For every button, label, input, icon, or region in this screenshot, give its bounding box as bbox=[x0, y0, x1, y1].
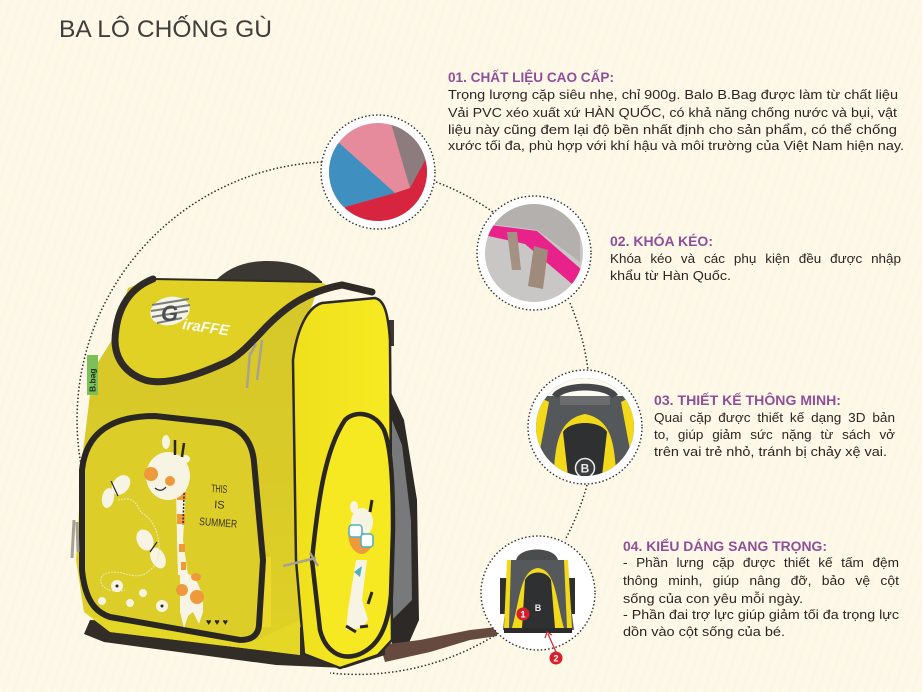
shoulder strap bbox=[388, 386, 419, 650]
flap top edge bbox=[153, 279, 322, 282]
text block 04: thông minh, giúp nâng đỡ, bảo vệ cột bbox=[623, 573, 899, 588]
circle 2: zipper bbox=[477, 196, 591, 310]
badge 1: 1 bbox=[520, 610, 526, 620]
text block 04: sống của con yêu mỗi ngày. bbox=[623, 591, 803, 606]
giraffe neck bbox=[176, 488, 188, 575]
text block 01: Vải PVC xéo xuất xứ HÀN QUỐC, có khả năng chống nước và bụi, vật bbox=[448, 105, 897, 120]
text block 04: 04. KIỂU DÁNG SANG TRỌNG: bbox=[623, 539, 827, 554]
front panel bbox=[76, 279, 320, 655]
butterflies bbox=[100, 471, 169, 591]
brand tag: B.bag bbox=[88, 368, 98, 392]
hearts: ♥♥♥ bbox=[206, 617, 228, 627]
side pocket bbox=[312, 414, 393, 657]
lower strap tail bbox=[380, 627, 497, 662]
back handle bbox=[214, 261, 322, 290]
flap logo: G bbox=[161, 301, 178, 326]
side giraffe bbox=[346, 500, 374, 632]
text block 03: trên vai trẻ nhỏ, tránh bị chảy xệ vai. bbox=[654, 444, 887, 459]
bag bottom bbox=[84, 620, 385, 668]
circle 3: handle detail bbox=[528, 370, 642, 484]
flowers bbox=[98, 580, 168, 612]
arrow to badge 2 bbox=[545, 632, 556, 652]
back mesh bbox=[392, 420, 412, 620]
this is summer lettering: SUMMER bbox=[199, 516, 238, 531]
pocket pull bbox=[72, 520, 78, 558]
text block 04: dồn vào cột sống của bé. bbox=[623, 624, 785, 639]
giraffe illustration bbox=[144, 435, 204, 628]
top flap bbox=[115, 279, 330, 382]
text block 01: Trọng lượng cặp siêu nhẹ, chỉ 900g. Balo B.Bag được làm từ chất liệu bbox=[448, 87, 898, 102]
text block 04: - Phần đai trợ lực giúp giảm tối đa trọng lực bbox=[623, 607, 900, 622]
top strap bump bbox=[389, 320, 394, 346]
text block 02 bbox=[610, 234, 901, 283]
text block 04: - Phần lưng cặp được thiết kế tấm đệm bbox=[623, 555, 899, 570]
giraffe head bbox=[146, 452, 190, 500]
this is summer lettering: IS bbox=[214, 499, 225, 512]
text block 02: 02. KHÓA KÉO: bbox=[610, 234, 713, 249]
text block 01: xước tối đa, phù hợp với khí hậu và môi trường của Việt Nam hiện nay. bbox=[448, 138, 904, 153]
giraffe body bbox=[180, 572, 203, 628]
lower front strip bbox=[84, 612, 300, 655]
text block 02: Khóa kéo và các phụ kiện đều được nhập bbox=[610, 251, 901, 266]
mini backpack: B bbox=[535, 603, 542, 613]
title: BA LÔ CHỐNG GÙ bbox=[59, 15, 272, 43]
text block 01: liệu này cũng đem lại độ bền nhất định cho sản phẩm, có thể chống bbox=[448, 122, 897, 137]
text block 04 bbox=[623, 539, 900, 639]
flap thick binding bbox=[115, 279, 372, 382]
brand tag bbox=[87, 355, 98, 395]
text block 02: khẩu từ Hàn Quốc. bbox=[610, 268, 731, 283]
circle 4: back view bbox=[481, 536, 595, 664]
side pocket zipper pull bbox=[283, 553, 318, 566]
this is summer lettering: THIS bbox=[211, 483, 228, 496]
pocket gusset highlight bbox=[257, 557, 271, 627]
text block 03 bbox=[654, 393, 895, 459]
text block 03: to, giúp giảm sức nặng từ sách vở bbox=[654, 427, 895, 442]
front pocket bbox=[82, 416, 263, 640]
side panel bbox=[293, 298, 392, 668]
flap logo: iraFFE bbox=[181, 316, 231, 340]
badge 2: 2 bbox=[553, 654, 559, 664]
backpack bbox=[72, 261, 497, 668]
text block 03: Quai cặp được thiết kế dạng 3D bản bbox=[654, 410, 895, 425]
flap logo bbox=[148, 293, 231, 340]
dotted connector arcs bbox=[77, 162, 588, 674]
circle 1: fabric bbox=[321, 115, 435, 229]
text block 01: 01. CHẤT LIỆU CAO CẤP: bbox=[448, 70, 614, 85]
this is summer lettering bbox=[199, 483, 238, 531]
flap zipper pulls bbox=[247, 340, 262, 388]
circle 3: handle detail: B bbox=[581, 462, 590, 476]
text block 01 bbox=[448, 70, 904, 153]
text block 03: 03. THIẾT KẾ THÔNG MINH: bbox=[654, 393, 841, 408]
